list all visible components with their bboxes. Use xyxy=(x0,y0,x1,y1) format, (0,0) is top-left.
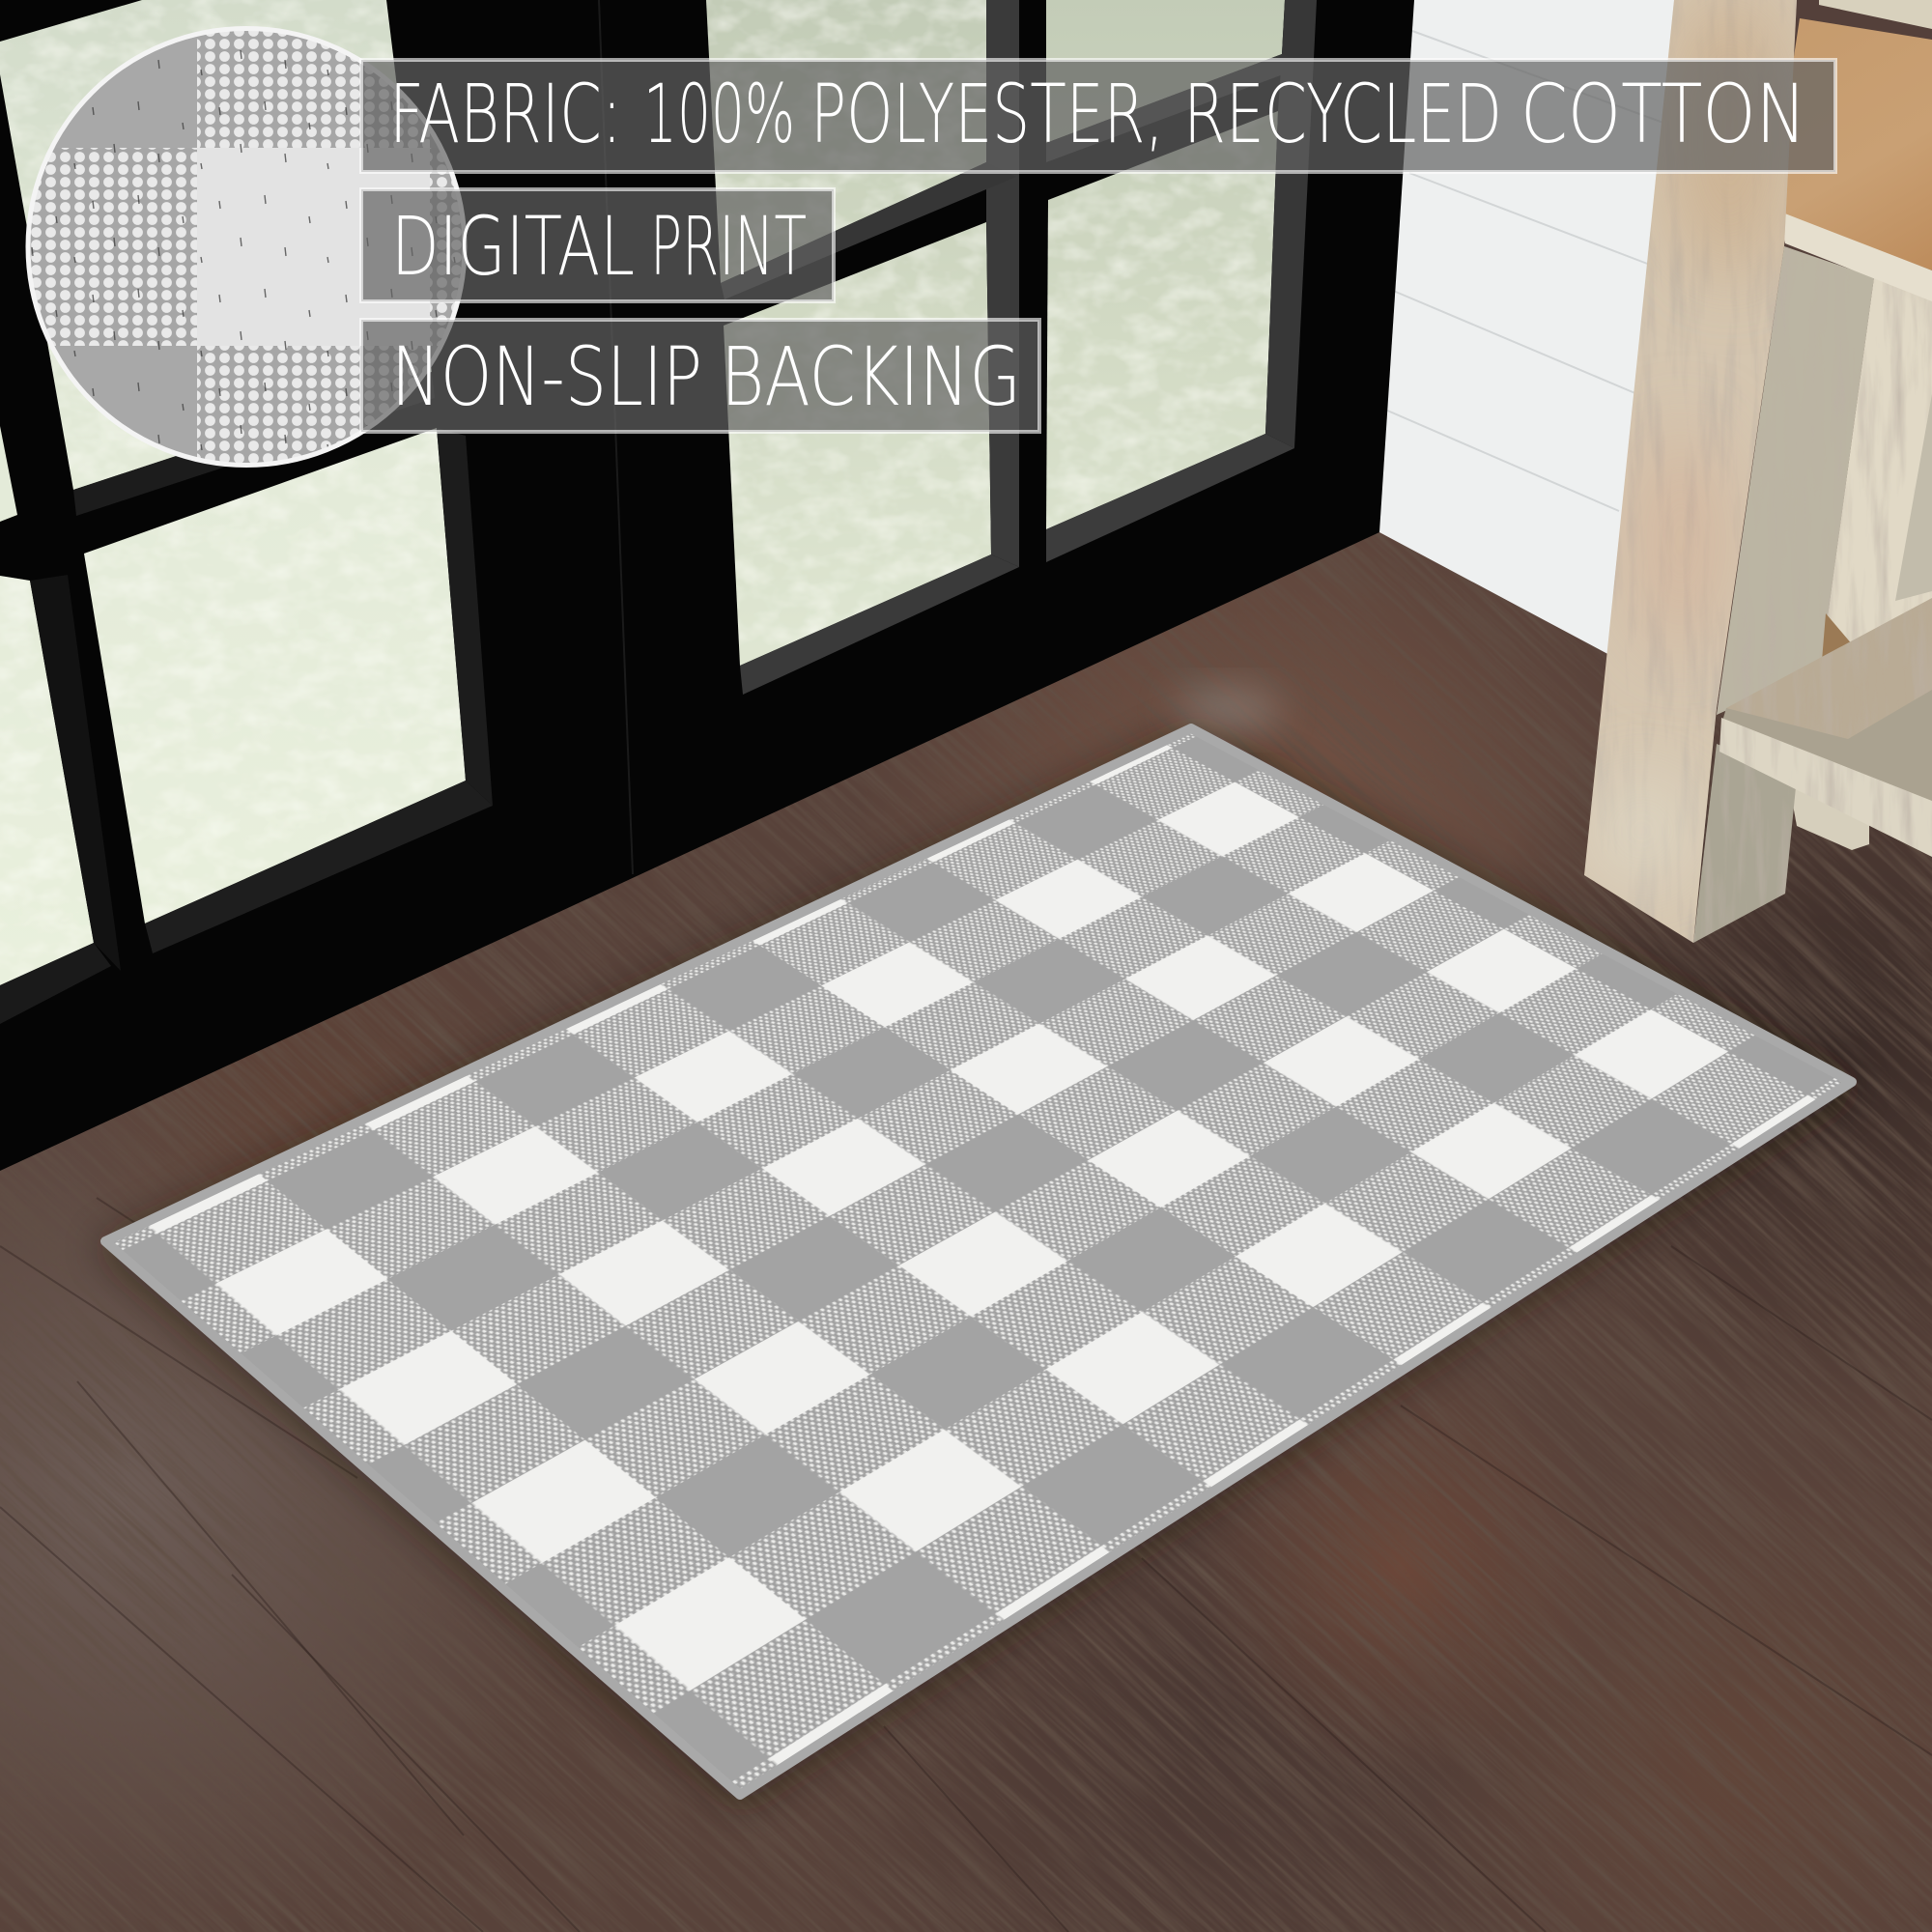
callout: fabric: COTTON xyxy=(1520,67,1806,161)
bench: shelf top xyxy=(1726,598,1932,739)
wood floor xyxy=(0,386,1932,1932)
callout: fabric: POLYESTER, xyxy=(810,67,1164,161)
callout: non-slip backing xyxy=(361,320,1039,432)
bench: shelf rail xyxy=(1719,718,1932,857)
rug shadow on floor xyxy=(97,724,1860,1806)
callout: digital print: PRINT xyxy=(650,199,807,294)
callout: non-slip backing: BACKING xyxy=(721,329,1021,424)
callout: digital print xyxy=(361,189,834,301)
callout: fabric: 100% xyxy=(643,67,795,161)
bench: leg side xyxy=(1693,744,1797,943)
bench: wood drawer xyxy=(1771,18,1932,270)
bench: lower cream leg xyxy=(1787,773,1869,850)
back wall with shiplap xyxy=(1379,0,1700,657)
callout: fabric: RECYCLED xyxy=(1183,67,1502,161)
callout: digital print: DIGITAL xyxy=(391,199,635,294)
rug stitched edge xyxy=(105,728,1852,1795)
door panes xyxy=(0,0,1285,985)
callout: fabric xyxy=(361,60,1835,172)
bench: leg front xyxy=(1584,0,1797,943)
bench: top rail xyxy=(1819,0,1932,29)
bench: nook shadow xyxy=(1822,613,1853,661)
bench: cream band xyxy=(1777,211,1932,301)
black french door xyxy=(0,0,1414,1171)
door muntin bevels xyxy=(0,0,1317,1024)
bench: gap below shelf xyxy=(1721,676,1932,821)
fabric swatch circle xyxy=(19,19,473,473)
rug: buffalo check in perspective xyxy=(114,734,1843,1789)
bench: side panel xyxy=(1717,246,1874,715)
wooden bench xyxy=(1584,0,1932,943)
glow by rug corner xyxy=(1174,689,1280,731)
bench: back board xyxy=(1821,277,1932,667)
callout: non-slip backing: NON-SLIP xyxy=(391,329,702,424)
callout: fabric: FABRIC: xyxy=(389,67,622,161)
